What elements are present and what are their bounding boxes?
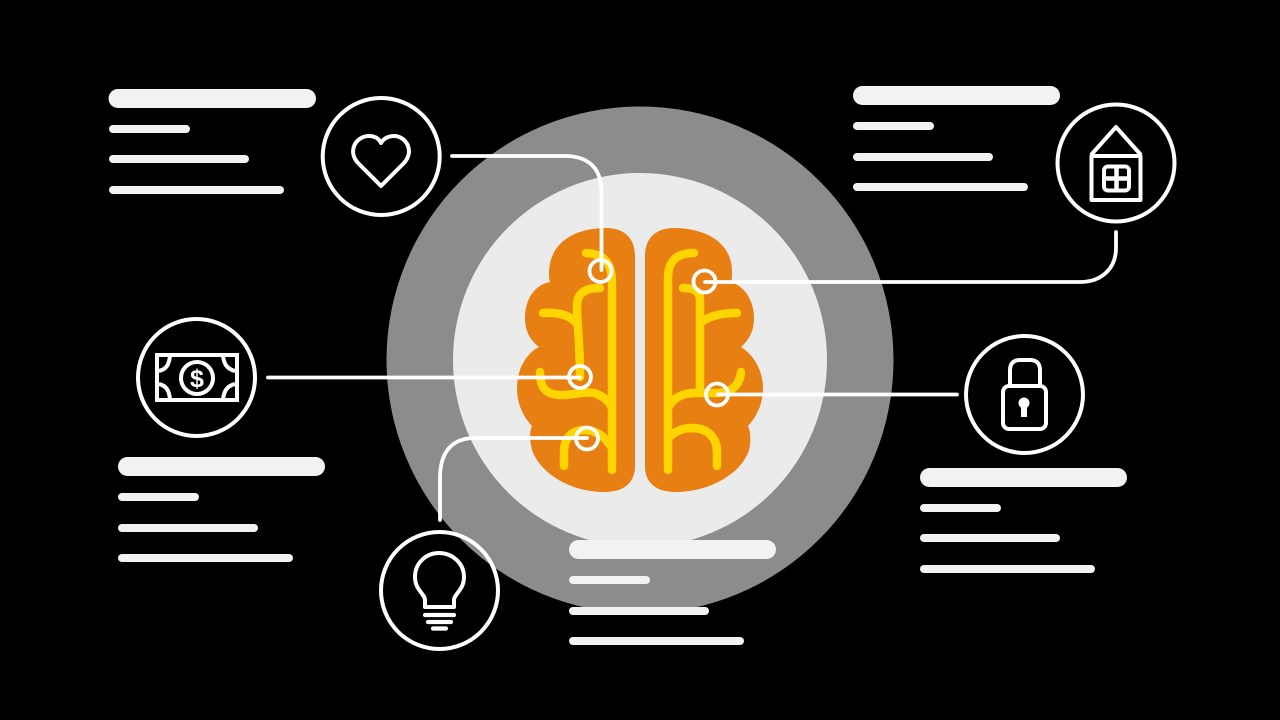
connector: money to brain xyxy=(268,376,580,379)
icon: heart xyxy=(323,98,440,215)
icon: padlock xyxy=(966,336,1083,453)
connector: lock to brain xyxy=(718,393,957,396)
text block: middle left xyxy=(118,457,325,562)
right hemisphere pathways xyxy=(668,253,741,470)
icon: money xyxy=(138,319,255,436)
connector: bulb to brain xyxy=(440,438,587,520)
connector lines xyxy=(268,156,1116,520)
icon: light bulb xyxy=(381,532,498,649)
text block: top right xyxy=(853,86,1060,191)
left hemisphere pathways xyxy=(540,253,612,470)
connector: house to brain xyxy=(705,232,1116,282)
connector nodes xyxy=(569,260,728,450)
text block: middle right xyxy=(920,468,1127,573)
icon: house xyxy=(1058,104,1174,222)
text block: top left xyxy=(108,89,316,194)
connector: heart to brain xyxy=(452,156,602,270)
text block: bottom centre xyxy=(569,540,776,645)
brain illustration xyxy=(517,228,763,492)
inner light circle xyxy=(453,173,827,547)
outer grey circle xyxy=(386,106,894,614)
right hemisphere xyxy=(645,228,763,492)
dollar sign: $ xyxy=(190,365,204,393)
left hemisphere xyxy=(517,228,635,492)
